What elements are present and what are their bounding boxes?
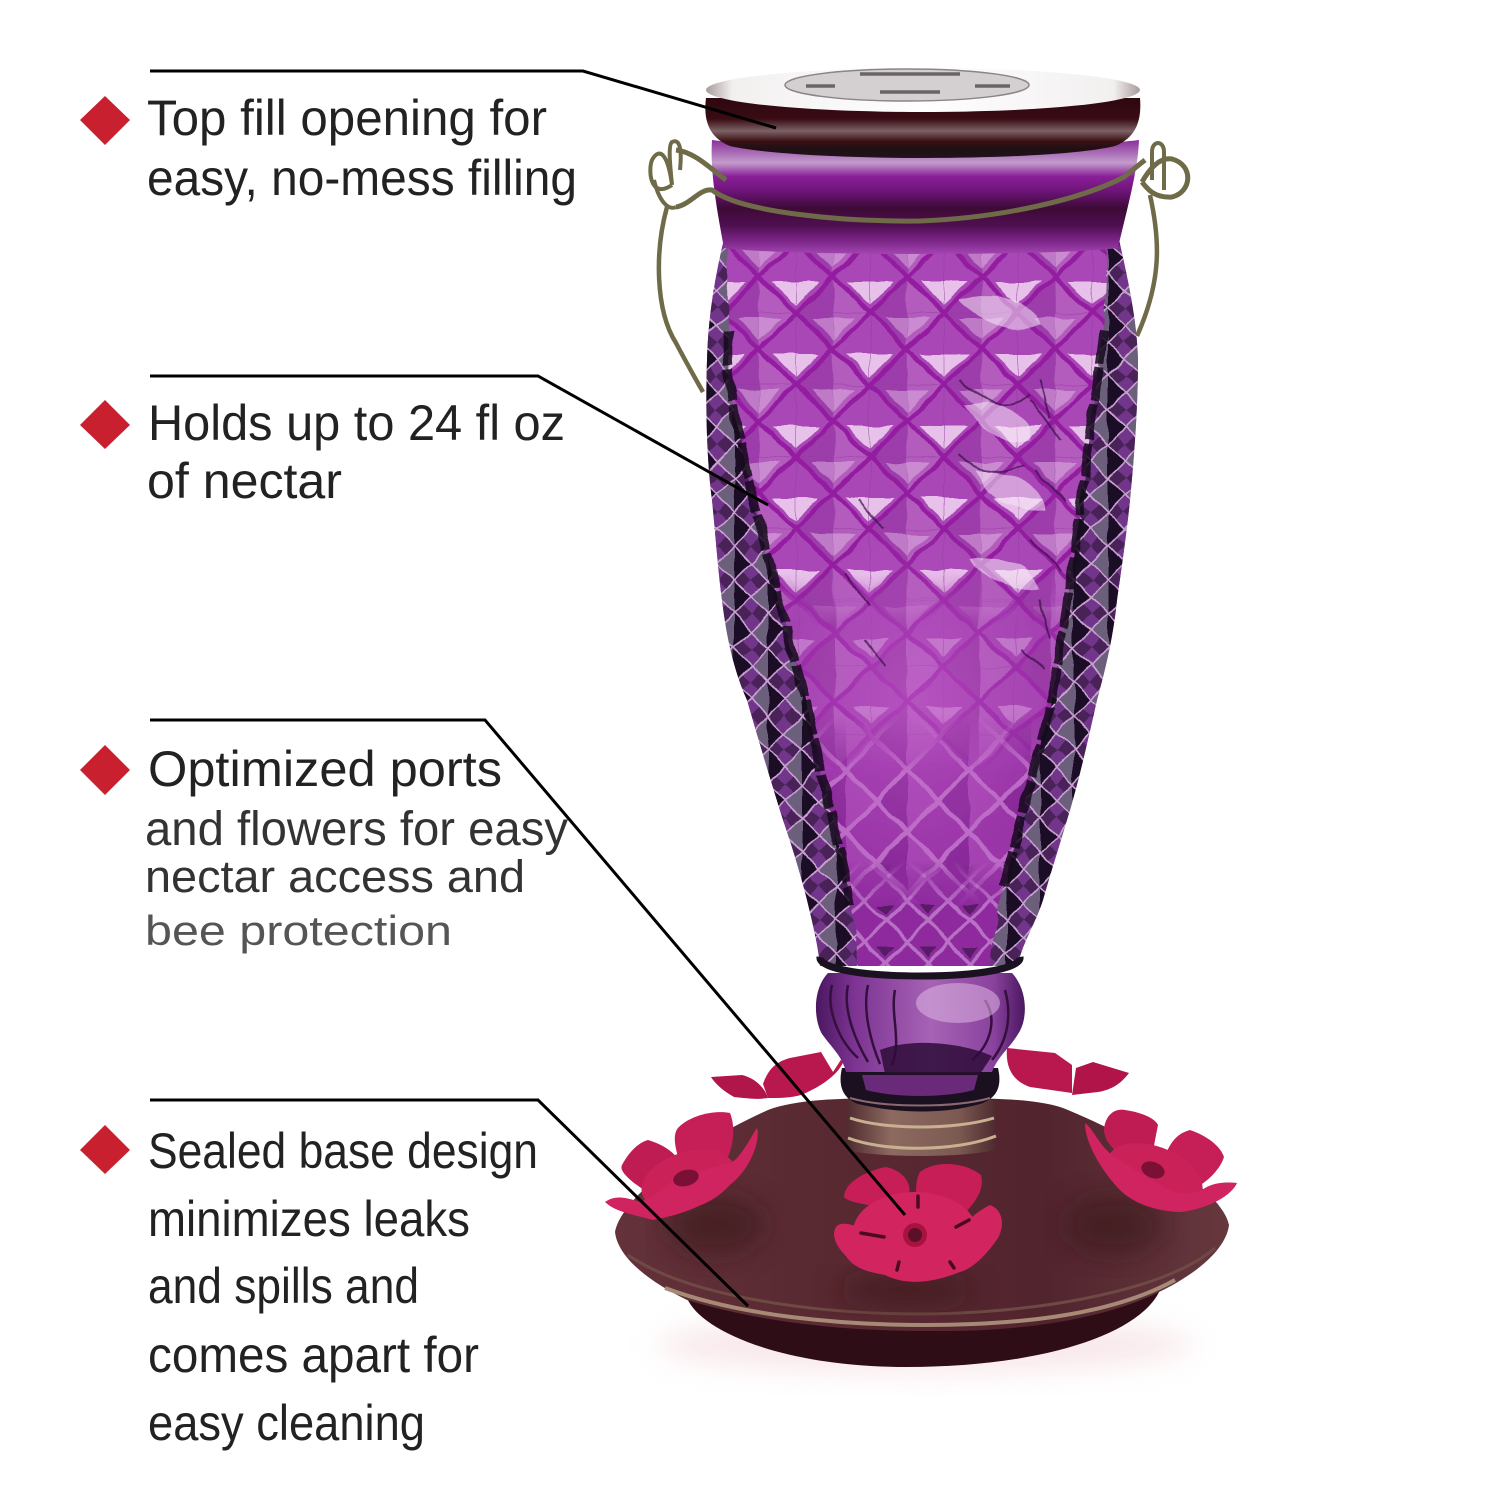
dark edge lattice right bbox=[990, 242, 1138, 966]
callout text: Sealed base design bbox=[148, 1123, 538, 1179]
callout text: Optimized ports bbox=[148, 741, 502, 797]
callout 1: top fill opening bbox=[80, 71, 776, 206]
callout 2: capacity bbox=[80, 376, 768, 509]
lid top bbox=[706, 68, 1140, 112]
callout text: comes apart for bbox=[148, 1327, 479, 1383]
callout text: and spills and bbox=[148, 1258, 419, 1314]
callout text: nectar access and bbox=[145, 851, 525, 902]
lid logo badge bbox=[785, 69, 1029, 101]
callout text: of nectar bbox=[147, 453, 342, 509]
glass reservoir with diamond pattern bbox=[706, 242, 1138, 966]
bullet diamond bbox=[80, 96, 130, 145]
base lower dish bbox=[687, 1270, 1160, 1367]
jar neck bbox=[712, 140, 1139, 254]
leader line bbox=[150, 376, 768, 505]
right feeding flower bbox=[1085, 1110, 1237, 1220]
glass neck collar bbox=[841, 1068, 999, 1112]
callout 3: ports and flowers bbox=[80, 720, 905, 1215]
callout text: and flowers for easy bbox=[145, 803, 568, 856]
bullet diamond bbox=[80, 400, 130, 449]
leader line bbox=[150, 71, 776, 128]
callout text: easy, no-mess filling bbox=[147, 150, 577, 206]
callout text bbox=[147, 90, 577, 206]
dark diagonal stripes bbox=[728, 330, 850, 905]
dark edge lattice left bbox=[706, 243, 858, 966]
dark texture near right side bbox=[845, 380, 1065, 670]
callout text: easy cleaning bbox=[148, 1395, 425, 1451]
callout text bbox=[148, 1123, 538, 1451]
left feeding flower bbox=[605, 1112, 758, 1221]
callout text: Top fill opening for bbox=[147, 90, 547, 146]
bronze collar bbox=[846, 1100, 996, 1156]
bullet diamond bbox=[80, 745, 130, 795]
leader line bbox=[150, 1100, 748, 1306]
back right flower bbox=[1007, 1048, 1129, 1095]
callout text: bee protection bbox=[145, 907, 452, 954]
flower shadows on dome bbox=[665, 1195, 1165, 1304]
wire handle band and loops bbox=[650, 141, 1188, 221]
glass reflections bbox=[960, 296, 1045, 590]
feeder product illustration bbox=[605, 68, 1237, 1373]
leader line bbox=[150, 720, 905, 1215]
callout text bbox=[145, 741, 568, 954]
back left flower bbox=[711, 1052, 846, 1099]
callout 4: sealed base bbox=[80, 1100, 748, 1451]
callout text bbox=[147, 395, 565, 509]
black ring above bulb bbox=[820, 957, 1020, 976]
callout text: minimizes leaks bbox=[148, 1191, 470, 1247]
base rim highlight bbox=[665, 1280, 1175, 1325]
callout text: Holds up to 24 fl oz bbox=[148, 395, 565, 451]
metal lid rim bbox=[705, 98, 1140, 158]
front feeding flower bbox=[834, 1164, 1002, 1282]
base dome lid bbox=[615, 1098, 1229, 1331]
wire handle back arms bbox=[659, 195, 1157, 392]
glass bulb bbox=[816, 973, 1025, 1072]
base cast shadow bbox=[655, 1317, 1195, 1373]
bullet diamond bbox=[80, 1125, 130, 1174]
